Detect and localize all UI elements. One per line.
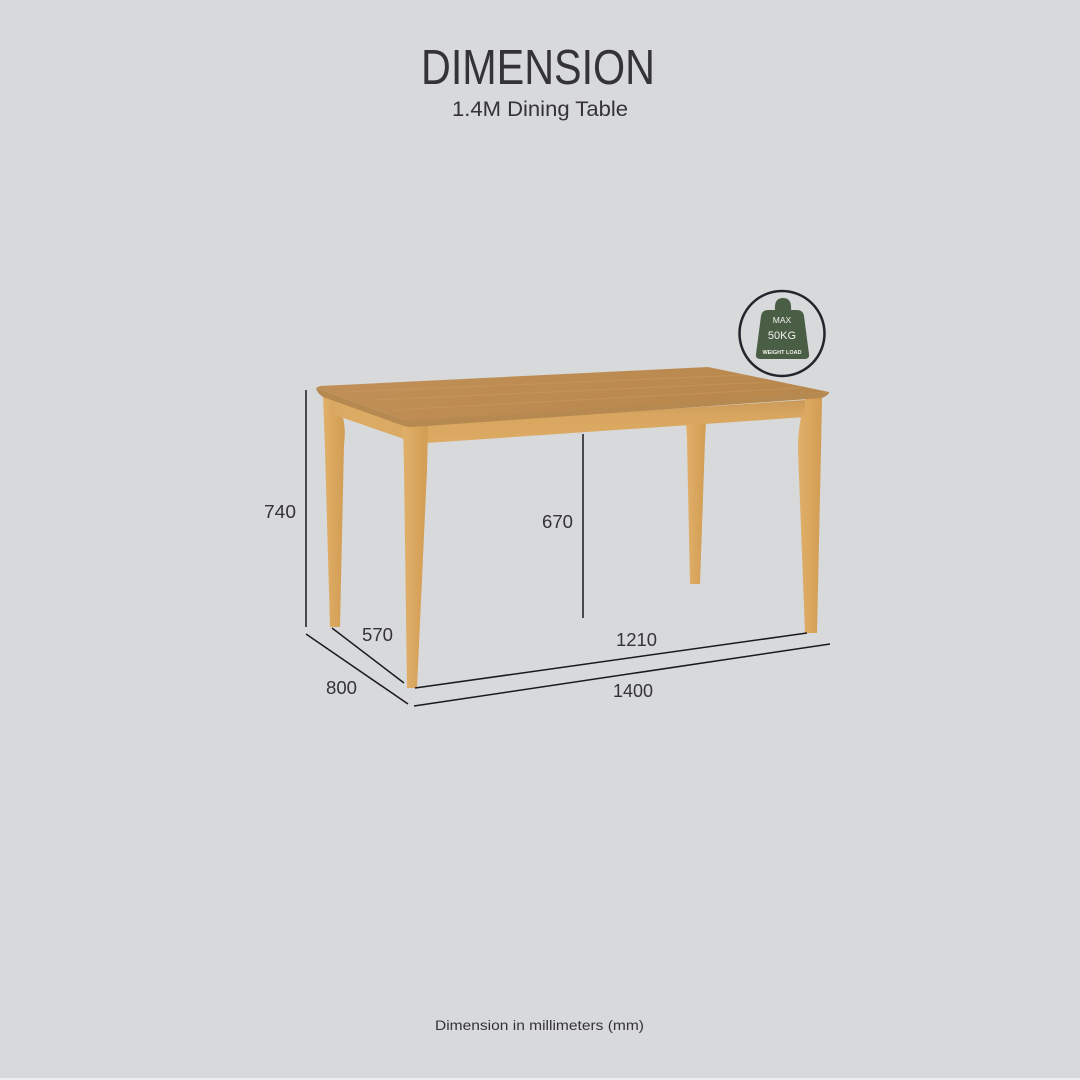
- left apron: [335, 400, 404, 439]
- front apron: [426, 400, 806, 443]
- footnote: Dimension in millimeters (mm): [435, 1018, 644, 1033]
- badge circle: [740, 291, 824, 376]
- back left leg: [323, 396, 345, 627]
- back right leg: [686, 422, 706, 584]
- label 1210: 1210: [616, 630, 657, 650]
- weight text: max: MAX: [773, 315, 792, 325]
- front left leg: [403, 424, 428, 688]
- weight text: 50kg: 50KG: [768, 330, 796, 342]
- weight text: weight load: WEIGHT LOAD: [762, 350, 802, 356]
- back right corner leg: [798, 397, 822, 633]
- table top front edge: [316, 388, 829, 427]
- 800 depth line: [306, 634, 408, 704]
- weight load badge: [740, 291, 824, 376]
- 740 height line: [305, 390, 307, 627]
- 1400 width line: [414, 644, 830, 706]
- dimension lines: [306, 390, 830, 706]
- label 800: 800: [326, 678, 357, 698]
- label 670: 670: [542, 512, 573, 532]
- label 1400: 1400: [613, 681, 653, 701]
- icon: weight: [756, 298, 809, 359]
- title: DIMENSION: [421, 41, 655, 95]
- subtitle: 1.4M Dining Table: [452, 98, 628, 121]
- table top surface: [316, 367, 829, 421]
- label 570: 570: [362, 625, 393, 645]
- bottom edge strip: [0, 1078, 1080, 1080]
- label 740: 740: [264, 502, 296, 522]
- wood grain: [345, 375, 800, 410]
- table illustration: [316, 367, 829, 688]
- 1210 width line: [415, 633, 807, 688]
- 670 height line: [582, 434, 584, 618]
- 570 depth line: [332, 628, 404, 683]
